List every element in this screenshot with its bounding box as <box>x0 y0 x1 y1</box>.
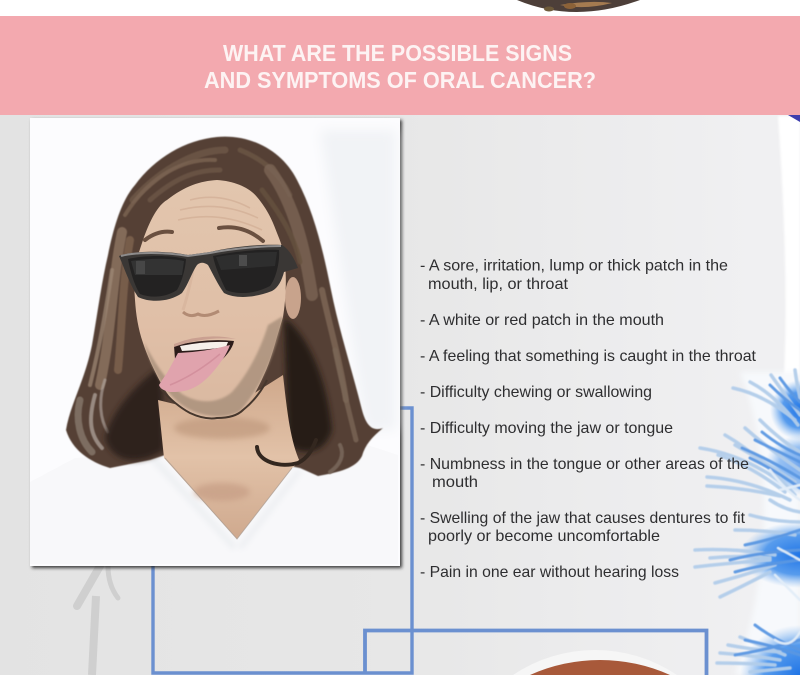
neck <box>158 375 300 539</box>
collar edge <box>165 458 292 539</box>
hair back <box>66 137 383 476</box>
symptoms list: - Pain in one ear without hearing loss <box>420 564 679 581</box>
symptoms list <box>420 258 757 581</box>
lens reflections <box>131 259 184 275</box>
hair curl <box>257 440 316 465</box>
left lens <box>128 256 186 297</box>
symptoms list: mouth <box>432 474 478 491</box>
symptoms list: - Difficulty chewing or swallowing <box>420 384 652 401</box>
pink title banner <box>0 16 800 115</box>
backdrop shading <box>320 130 396 430</box>
heading line two: AND SYMPTOMS OF ORAL CANCER? <box>204 67 596 93</box>
dark under-hair <box>105 318 332 460</box>
grey arrow <box>77 566 118 675</box>
symptoms list: - Numbness in the tongue or other areas of the <box>420 456 749 473</box>
blue connector lines <box>153 408 706 675</box>
ear <box>285 277 301 319</box>
teeth <box>180 342 228 351</box>
stubble beard <box>144 316 283 416</box>
nose <box>183 270 219 316</box>
photo: man sticking out tongue <box>30 118 400 566</box>
photo frame <box>30 118 400 566</box>
blue corner fragment <box>788 115 800 122</box>
tongue crease <box>170 354 220 385</box>
heading: WHAT ARE THE POSSIBLE SIGNS <box>223 40 572 66</box>
t-shirt <box>30 442 398 564</box>
pompom bristles <box>695 370 800 672</box>
face <box>133 180 286 420</box>
neck shadow <box>174 417 270 439</box>
sunglasses <box>119 245 298 301</box>
jaw line <box>160 380 267 418</box>
blue pompom decoration <box>680 370 800 675</box>
symptoms list: - A feeling that something is caught in the throat <box>420 348 757 365</box>
wooden bowl <box>513 650 677 675</box>
mouth <box>174 336 236 372</box>
symptoms list: poorly or become uncomfortable <box>428 528 660 545</box>
symptoms list: - A sore, irritation, lump or thick patch in the <box>420 258 728 274</box>
symptoms list: - Difficulty moving the jaw or tongue <box>420 420 673 437</box>
symptoms list: - A white or red patch in the mouth <box>420 312 664 329</box>
hair strands <box>78 150 356 472</box>
tongue <box>159 345 230 392</box>
eyebrows <box>145 227 263 241</box>
forehead creases <box>178 197 262 230</box>
right lens <box>213 250 279 293</box>
upper lip <box>174 336 236 347</box>
symptoms list: mouth, lip, or throat <box>428 276 569 293</box>
symptoms list: - Swelling of the jaw that causes dentures to fit <box>420 510 746 527</box>
top strip with bowl of seeds <box>0 0 800 18</box>
